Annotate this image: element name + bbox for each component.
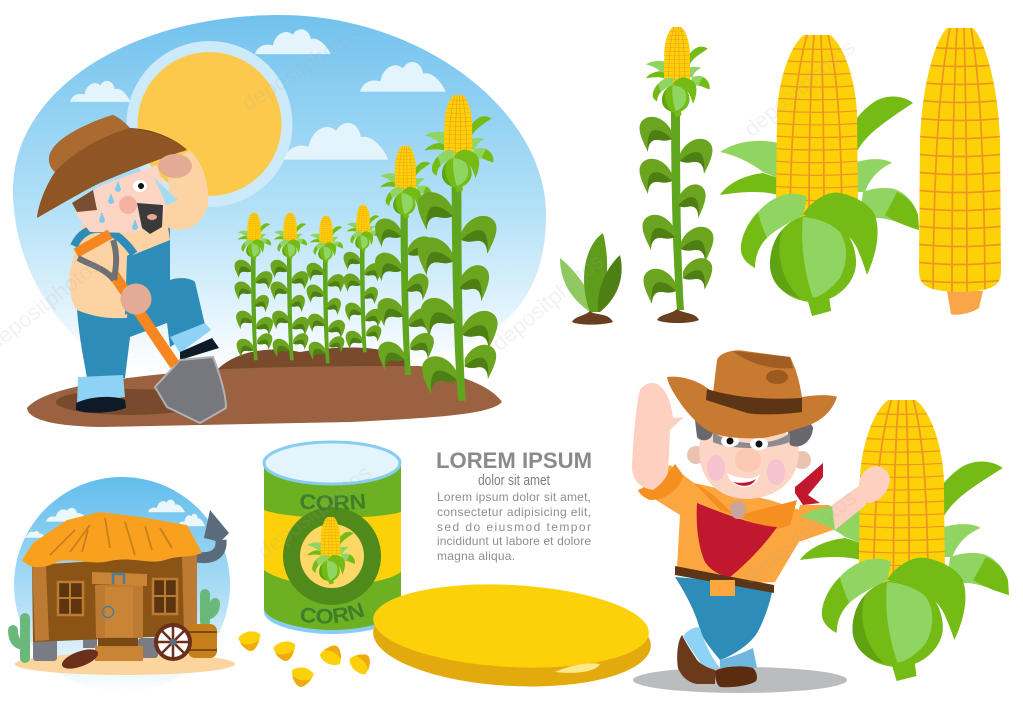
shirt [638, 464, 833, 583]
tall corn plant [640, 27, 713, 323]
watermarks [0, 21, 861, 589]
jeans [675, 577, 773, 668]
watermarks: depositphotos [739, 35, 860, 142]
cowboy [632, 350, 837, 687]
watermarks: depositphotos [487, 249, 608, 356]
can emblem [283, 507, 381, 605]
shovel [76, 234, 226, 423]
hut ground [15, 653, 235, 675]
belt [675, 566, 774, 596]
chimney [196, 510, 229, 558]
panel: farmer scene sky [13, 15, 546, 372]
heading: LOREM IPSUM [436, 448, 592, 473]
hut scene [13, 477, 235, 693]
thatched roof [22, 512, 202, 567]
bandana [697, 503, 777, 577]
hat [667, 350, 837, 438]
ground [27, 347, 502, 427]
farmer legs [77, 278, 205, 378]
husked corn cob [720, 35, 919, 316]
corn next to cowboy [800, 400, 1009, 681]
hut sky [14, 477, 230, 693]
yellow label band [264, 510, 401, 585]
corn plants in the field [235, 95, 498, 401]
hat [37, 115, 187, 218]
wagon wheel [156, 625, 190, 659]
stilts [33, 638, 158, 661]
barrel [188, 624, 217, 658]
can text [300, 494, 366, 624]
torso and bib [69, 220, 170, 318]
can lid [264, 442, 400, 484]
shadow under cowboy [633, 667, 847, 693]
cacti [13, 594, 215, 658]
body text: consectetur adipisicing elit, [437, 505, 591, 519]
body text: Lorem ipsum dolor sit amet, [437, 490, 591, 504]
fallen wheel [60, 645, 100, 673]
bandana knot [795, 463, 823, 505]
cowboy forearm and hand [832, 466, 890, 530]
steps [95, 638, 143, 661]
corn cob [915, 28, 1005, 315]
head [687, 419, 813, 519]
body text: magna aliqua. [437, 549, 515, 563]
windows [58, 579, 177, 615]
farmer with shovel [37, 115, 226, 423]
cuffs and boots [76, 323, 219, 413]
hut walls [32, 555, 197, 642]
raised arm [160, 150, 208, 230]
clouds [70, 29, 446, 160]
raised hand [632, 383, 684, 490]
body text [437, 490, 591, 563]
seedling [560, 233, 622, 325]
body text: incididunt ut labore et dolore [437, 534, 591, 548]
hut clouds [22, 500, 205, 538]
watermarks: depositphotos [237, 21, 366, 116]
can text: CORN [300, 602, 364, 624]
corn kernels [238, 630, 376, 689]
can text: CORN [300, 494, 366, 510]
boots [677, 635, 757, 687]
corn can [262, 440, 402, 634]
watermarks: depositphotos [253, 460, 376, 564]
head [72, 165, 178, 234]
yellow disc [371, 578, 653, 693]
subheading: dolor sit amet [478, 473, 550, 489]
watermarks: depositphotos [738, 485, 861, 589]
body text: sed do eiusmod tempor [437, 520, 591, 534]
icon: sun [126, 41, 292, 207]
